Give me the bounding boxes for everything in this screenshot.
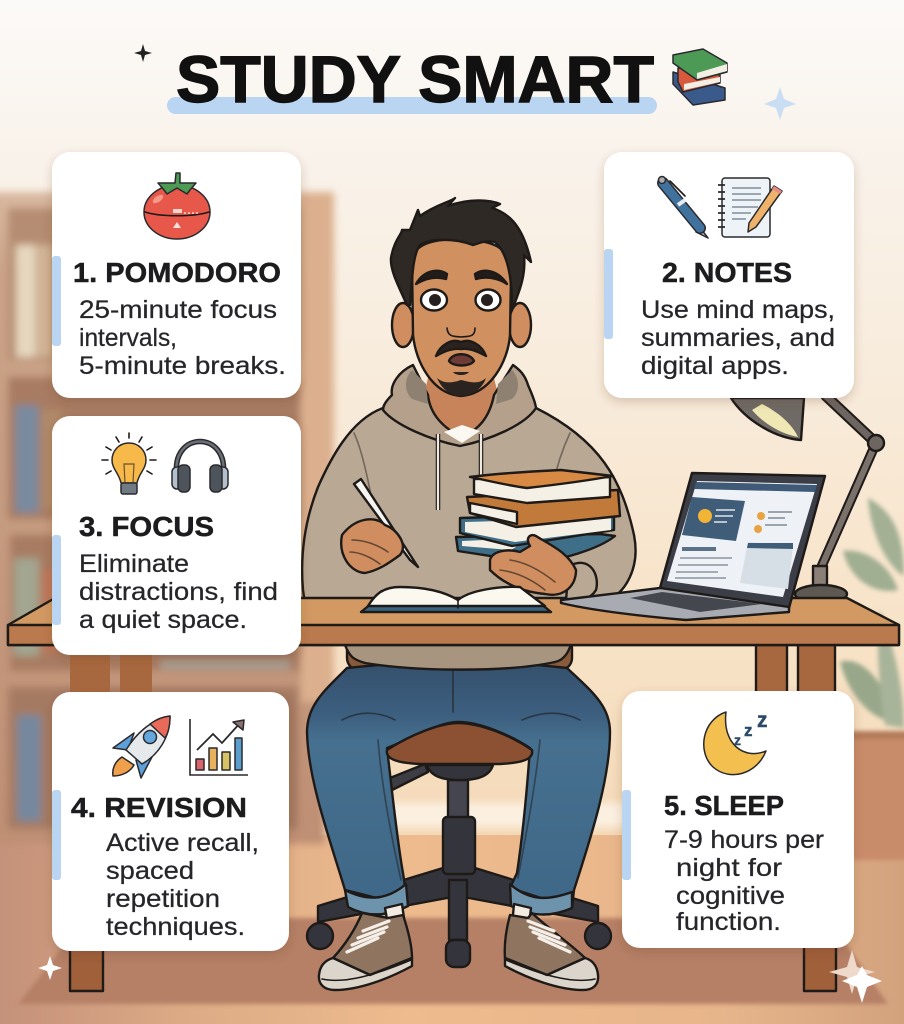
panel: notes — [604, 152, 854, 398]
book four — [456, 534, 615, 562]
icon: zzz: z — [744, 721, 752, 740]
book two — [467, 490, 620, 527]
hood inner shadow — [406, 370, 518, 404]
icon: zzz: z — [734, 732, 741, 748]
card tab — [52, 256, 61, 346]
card background — [52, 416, 301, 655]
t-shirt collar — [444, 425, 480, 443]
heading: 2. NOTES — [662, 257, 792, 288]
icon: tomato timer — [144, 173, 210, 239]
icon: moon — [704, 712, 766, 775]
panel: sleep — [622, 691, 854, 948]
title text: STUDY SMART — [176, 42, 654, 116]
body text: Use mind maps, — [641, 296, 835, 324]
body text: 25-minute focus — [79, 296, 277, 324]
table — [8, 598, 899, 645]
pencil — [354, 479, 418, 567]
table legs upper — [70, 644, 835, 695]
book one — [474, 477, 610, 503]
body text: repetition — [106, 885, 220, 913]
icon: rocket — [113, 716, 170, 778]
body text: intervals, — [79, 324, 177, 352]
chair back — [347, 636, 572, 670]
card background — [604, 152, 854, 398]
card tab — [604, 249, 613, 339]
floor rug — [18, 918, 888, 1004]
jeans — [307, 662, 610, 915]
body text — [79, 550, 278, 634]
right arm and sleeve — [566, 563, 597, 602]
floor — [0, 835, 904, 1024]
body text: Eliminate — [79, 550, 189, 578]
title — [167, 42, 657, 116]
right hand — [490, 535, 576, 595]
chair seat — [387, 723, 532, 764]
body text: summaries, and — [641, 324, 835, 352]
hoodie hem — [340, 600, 585, 670]
goatee — [437, 372, 486, 396]
heading: 5. SLEEP — [664, 790, 784, 821]
mustache — [436, 341, 486, 356]
body text — [641, 296, 835, 380]
body text: cognitive — [676, 882, 785, 910]
mouth — [449, 354, 474, 366]
right shoe — [505, 904, 598, 990]
card background — [52, 152, 301, 398]
icon: growth chart — [190, 719, 248, 775]
sparkle bottom right — [829, 950, 882, 1003]
panel: focus — [52, 416, 301, 655]
body text: digital apps. — [641, 352, 789, 380]
icon: zzz — [734, 709, 768, 748]
body text: function. — [676, 908, 781, 936]
icon: pen — [658, 176, 708, 238]
nose — [447, 328, 475, 337]
body text: distractions, find — [79, 578, 278, 606]
book three — [460, 513, 614, 546]
heading: 1. POMODORO — [73, 257, 281, 288]
hoodie hood — [383, 365, 536, 446]
body text: night for — [676, 854, 782, 882]
chair wheel left — [307, 923, 333, 949]
card background — [622, 691, 854, 948]
body text: Active recall, — [106, 829, 259, 857]
jeans cuffs — [345, 884, 408, 914]
laptop — [561, 473, 825, 620]
blurred bookshelf — [0, 192, 334, 844]
man — [302, 198, 636, 670]
panel: revision — [52, 692, 289, 951]
card tab — [52, 790, 61, 880]
body text — [79, 296, 286, 380]
blurred plant — [840, 498, 904, 860]
icon: notebook and pencil — [718, 178, 782, 237]
card tab — [52, 535, 61, 625]
desk lamp — [731, 396, 884, 603]
office chair — [307, 764, 611, 967]
sparkle top left — [134, 44, 152, 62]
heading: 3. FOCUS — [79, 511, 214, 542]
body text: techniques. — [106, 913, 245, 941]
icon: lightbulb — [102, 433, 156, 494]
sparkle bottom left — [38, 956, 62, 980]
table legs lower — [70, 940, 836, 991]
face — [412, 240, 511, 396]
body text: spaced — [106, 857, 194, 885]
body text: 5-minute breaks. — [79, 352, 286, 380]
neck — [420, 370, 502, 436]
eyebrows — [416, 271, 447, 284]
body text: 7-9 hours per — [664, 826, 824, 854]
left hand — [341, 519, 403, 573]
chair wheel front — [446, 940, 470, 967]
body text — [106, 829, 259, 941]
title underline — [167, 97, 657, 114]
panel: pomodoro — [52, 152, 301, 398]
heading: 4. REVISION — [71, 792, 247, 823]
ears — [392, 303, 414, 347]
sparkle top right — [764, 87, 796, 120]
body text — [664, 826, 824, 936]
chair wheel right — [585, 923, 611, 949]
baseboard — [330, 803, 904, 827]
body text: a quiet space. — [79, 606, 247, 634]
card background — [52, 692, 289, 951]
sleeve seams — [354, 433, 570, 500]
hoodie body — [302, 408, 636, 604]
card tab — [622, 790, 631, 880]
icon: headphones — [172, 442, 228, 492]
hair — [391, 198, 531, 310]
hoodie strings — [438, 434, 481, 510]
stack of books — [456, 470, 620, 562]
open book — [361, 587, 551, 612]
eyes — [421, 290, 447, 310]
icon: zzz: z — [757, 709, 768, 732]
icon: books — [673, 49, 727, 105]
left shoe — [319, 904, 412, 990]
